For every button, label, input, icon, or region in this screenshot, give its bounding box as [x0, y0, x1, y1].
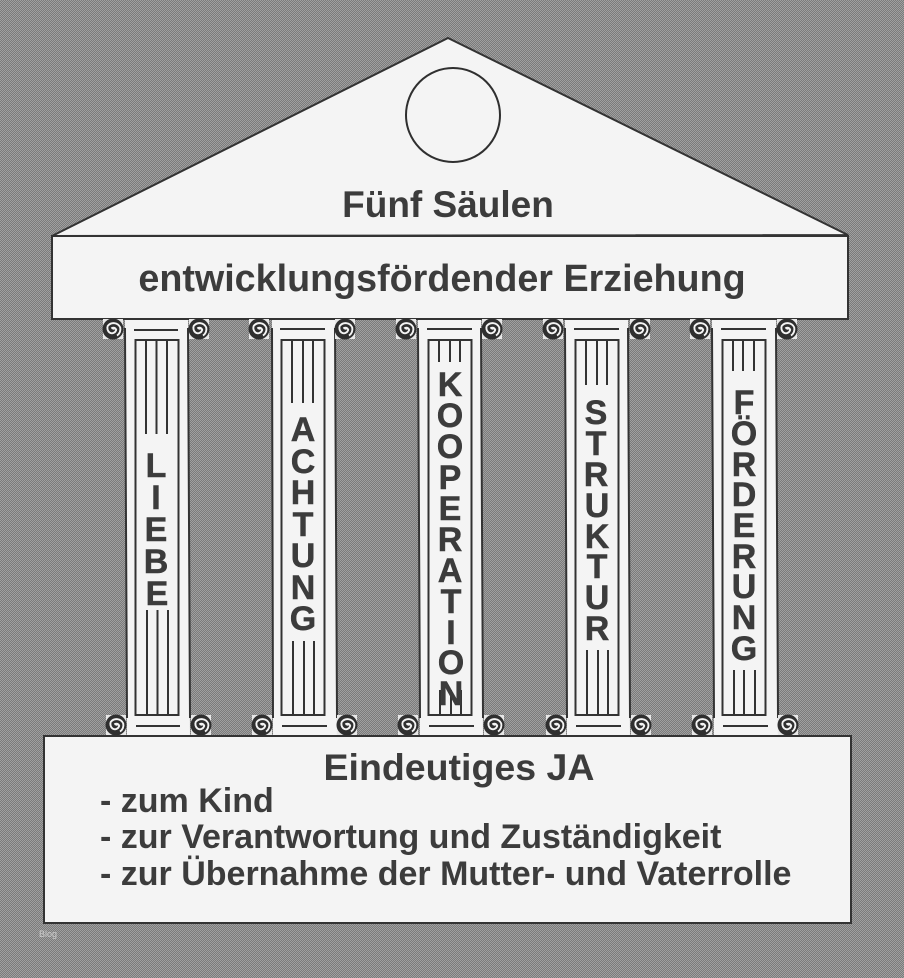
label: FÖRDERUNG: G	[731, 630, 757, 668]
label: ACHTUNG: T	[293, 506, 314, 544]
label: FÖRDERUNG: R	[732, 538, 756, 576]
label: FÖRDERUNG: U	[732, 568, 756, 606]
label: KOOPERATION: N	[439, 675, 463, 713]
label: STRUKTUR: R	[584, 456, 608, 494]
label: LIEBE: B	[144, 543, 168, 581]
label: STRUKTUR: S	[585, 394, 607, 432]
panel: base	[44, 736, 851, 923]
label: LIEBE: E	[145, 511, 167, 549]
label: KOOPERATION: R	[438, 521, 462, 559]
pillar: LIEBE	[102, 318, 212, 737]
label: ACHTUNG: A	[291, 411, 315, 449]
heading: Fünf Säulen: Fünf Säulen	[342, 184, 554, 225]
pillar: STRUKTUR	[542, 318, 652, 737]
label: STRUKTUR: T	[587, 548, 608, 586]
label: KOOPERATION: O	[438, 644, 464, 682]
pillar: KOOPERATION	[396, 318, 504, 737]
label: STRUKTUR: T	[586, 425, 607, 463]
label: STRUKTUR: K	[585, 518, 610, 556]
label: ACHTUNG: G	[290, 600, 316, 638]
panel: temple roof	[52, 38, 848, 236]
label: LIEBE: L	[146, 447, 166, 485]
text block: list of commitments: - zur Übernahme der Mutter- und Vaterrolle	[100, 855, 791, 893]
label: KOOPERATION: P	[439, 459, 461, 497]
label: KOOPERATION: T	[441, 583, 462, 621]
label: KOOPERATION: K	[438, 366, 463, 404]
heading: entwicklungsfördender Erziehung: entwicklungsfördender Erziehung	[138, 257, 746, 299]
label: FÖRDERUNG: F	[734, 384, 754, 422]
label: ACHTUNG: C	[291, 443, 315, 481]
label: KOOPERATION: I	[446, 614, 456, 652]
label: FÖRDERUNG: N	[732, 599, 756, 637]
panel: entablature	[52, 236, 848, 319]
label: FÖRDERUNG: R	[732, 446, 756, 484]
label: STRUKTUR: U	[585, 579, 609, 617]
label: STRUKTUR: R	[585, 610, 609, 648]
label: ACHTUNG: N	[291, 569, 315, 607]
label: KOOPERATION: O	[437, 428, 463, 466]
label: FÖRDERUNG: Ö	[731, 415, 757, 453]
label: KOOPERATION: O	[437, 397, 463, 435]
watermark: Blog	[39, 929, 57, 939]
pillar: ACHTUNG	[248, 318, 358, 737]
text block: list of commitments: - zur Verantwortung und Zuständigkeit	[100, 818, 721, 856]
text block: list of commitments: - zum Kind	[100, 782, 274, 820]
label: KOOPERATION: A	[438, 552, 462, 590]
label: LIEBE: E	[146, 575, 168, 613]
heading: Eindeutiges JA: Eindeutiges JA	[324, 746, 594, 788]
label: KOOPERATION: E	[439, 490, 461, 528]
label: FÖRDERUNG: D	[732, 476, 756, 514]
label: ACHTUNG: H	[291, 474, 315, 512]
label: FÖRDERUNG: E	[733, 507, 755, 545]
label: ACHTUNG: U	[291, 537, 315, 575]
icon: pediment circle	[406, 68, 500, 162]
pillar: FÖRDERUNG	[690, 318, 798, 737]
label: LIEBE: I	[151, 479, 161, 517]
label: STRUKTUR: U	[585, 487, 609, 525]
text block: list of commitments	[100, 782, 791, 893]
